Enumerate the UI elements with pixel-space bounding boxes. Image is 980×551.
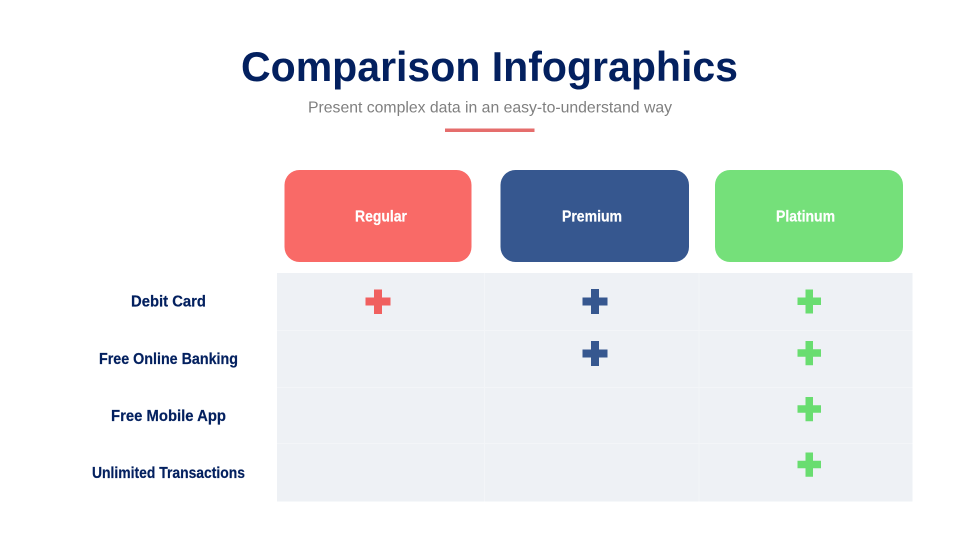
icon: Regular has Debit Card [366, 290, 390, 314]
icon: Platinum has Unlimited Transactions [798, 452, 821, 477]
icon: Platinum has Free Online Banking [798, 341, 821, 365]
column header: Premium [500, 170, 689, 262]
column header: Regular [284, 170, 472, 262]
row label: Free Mobile App: Free Mobile App [111, 408, 226, 425]
title underline [445, 128, 534, 132]
column header: Regular: Regular [355, 208, 407, 226]
column header: Platinum [715, 170, 903, 262]
subtitle: Present complex data in an easy-to-understand way [308, 100, 672, 116]
icon: Premium has Free Online Banking [582, 341, 608, 366]
column header: Platinum: Platinum [776, 208, 835, 226]
icon: Platinum has Free Mobile App [798, 397, 821, 421]
title: Comparison Infographics [241, 43, 738, 90]
row label: Debit Card: Debit Card [131, 294, 206, 310]
icon: Premium has Debit Card [582, 289, 608, 314]
row label: Unlimited Transactions: Unlimited Transactions [92, 465, 245, 482]
panel: comparison table [277, 273, 912, 502]
icon: Platinum has Debit Card [798, 290, 821, 314]
column header: Premium: Premium [562, 208, 622, 226]
row label: Free Online Banking: Free Online Banking [99, 351, 238, 368]
